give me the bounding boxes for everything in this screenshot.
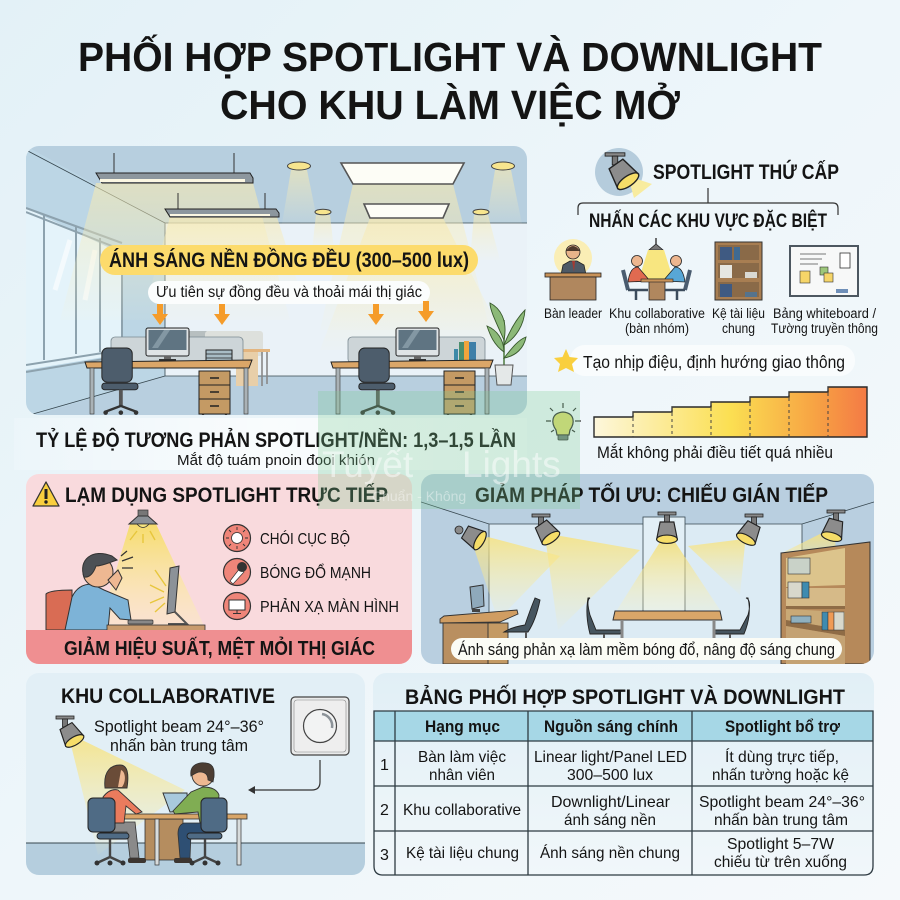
beam [71,739,185,855]
row 3: 3 [380,847,389,864]
dimmer switch [291,697,349,755]
ambient pill: ÁNH SÁNG NỀN ĐỒNG ĐỀU (300–500 lux) [109,248,469,272]
effect 1: glare: CHÓI CỤC BỘ [260,529,350,548]
effect 3: reflection: PHẢN XẠ MÀN HÌNH [260,597,399,616]
lamp [129,510,157,543]
watermark: Chuẩn - Không [372,488,466,504]
spotlight [56,716,86,750]
row 1: Bàn làm việc [418,749,506,766]
back wall [166,223,527,224]
linear lights [96,153,279,217]
light beams [66,170,522,330]
row 2: nhấn bàn trung tâm [714,812,848,829]
icon: shelf [715,242,762,300]
row 2: Downlight/Linear [551,794,671,811]
chairs [504,598,750,640]
consequence text: GIẢM HIỆU SUẤT, MỆT MỎI THỊ GIÁC [64,636,375,660]
solution caption pill: Ánh sáng phản xạ làm mềm bóng đổ, nâng độ sáng chung [458,640,835,659]
woman [88,765,146,866]
panel: collaborative zone [26,673,365,875]
labels: accent zones: Kệ tài liệu [712,306,765,321]
desk group left [85,328,270,418]
icon: whiteboard [790,246,858,296]
desk [107,625,205,631]
labels: accent zones: chung [722,321,755,336]
panel: secondary spotlight [544,148,878,462]
panel: indirect lighting solution [421,474,874,664]
labels: accent zones: Bảng whiteboard / [773,306,876,321]
solution heading: GIẢM PHÁP TỐI ƯU: CHIẾU GIÁN TIẾP [475,483,828,507]
note pill: Ưu tiên sự đồng đều và thoải mái thị giác [156,284,422,301]
rhythm pill: Tạo nhịp điệu, định hướng giao thông [583,352,845,372]
row 1 [380,747,849,784]
table heading: BẢNG PHỐI HỢP SPOTLIGHT VÀ DOWNLIGHT [405,685,845,709]
table header row [374,711,873,741]
watermark: Tuyết [322,444,414,485]
row 2: 2 [380,802,389,819]
left wall [26,146,165,420]
icon: warning [33,482,59,506]
spotlights [455,510,846,552]
row 2: ánh sáng nền [564,812,656,829]
title: PHỐI HỢP SPOTLIGHT VÀ DOWNLIGHT [78,34,822,80]
title: CHO KHU LÀM VIỆC MỞ [220,82,680,128]
row 2: Spotlight beam 24°–36° [699,794,865,811]
effect 2: shadow: BÓNG ĐỔ MẠNH [260,563,371,582]
spotlight heading: SPOTLIGHT THỨ CẤP [653,160,839,184]
table header row: Spotlight bổ trợ [725,718,840,736]
back wall [489,524,802,664]
left desk [440,585,518,664]
beam note: nhấn bàn trung tâm [110,737,248,755]
adaptation note: Mắt không phải điều tiết quá nhiều [597,443,833,462]
panel lights [341,163,464,218]
title [78,34,822,128]
icon: spotlight [595,148,652,198]
window [26,208,122,372]
accent heading: NHẤN CÁC KHU VỰC ĐẶC BIỆT [589,210,827,232]
beam note: Spotlight beam 24°–36° [94,718,264,736]
plant [487,303,526,385]
icon: collaborative group [623,238,690,300]
labels: accent zones [544,306,878,336]
arrow [248,760,320,794]
row 1: Linear light/Panel LED [534,749,687,766]
row 3: Spotlight 5–7W [727,836,835,853]
row 3: chiếu từ trên xuống [714,854,847,871]
misuse heading: LẠM DỤNG SPOTLIGHT TRỰC TIẾP [65,484,388,507]
table header row: Nguồn sáng chính [544,718,678,736]
watermark: Lights [462,444,561,485]
effect 3: reflection [224,592,399,620]
icon: bulb [546,403,581,440]
row 2: Khu collaborative [403,802,521,819]
row 1: nhân viên [429,767,495,784]
beams [473,534,838,630]
desk group right [331,328,493,418]
person at desk [46,551,153,630]
center table [613,611,722,640]
row 1: Ít dùng trực tiếp, [725,747,839,766]
panel: coordination table [373,673,874,877]
effect 2: shadow [224,558,371,586]
beam note [94,718,264,755]
contrast ratio band [14,418,527,470]
rhythm pill [554,345,855,376]
table grid [374,711,873,875]
panel: direct spotlight misuse [26,474,412,664]
downlights [288,162,514,215]
labels: accent zones: Khu collaborative [609,306,705,321]
table [122,814,247,865]
row 1: 1 [380,757,389,774]
row 2 [380,794,865,829]
bracket [578,188,838,215]
effect band [26,630,412,664]
contrast ratio band: TỶ LỆ ĐỘ TƯƠNG PHẢN SPOTLIGHT/NỀN: 1,3–1,5 LẦN [36,428,516,452]
row 3: Ánh sáng nền chung [540,843,680,862]
row 1: 300–500 lux [567,767,653,784]
orange arrows [152,301,434,325]
contrast ratio band: Mắt độ tuám pnoin đooi khión [177,452,375,469]
effect 1: glare [224,524,350,552]
beam [109,524,203,624]
row 3 [380,836,847,871]
icon: leader desk [545,239,601,300]
labels: accent zones: Tường truyền thông [771,321,878,336]
ceiling [26,146,527,224]
panel: ambient office scene [26,146,527,420]
column [643,517,685,613]
monitor with glare [150,566,187,624]
labels: accent zones: (bàn nhóm) [625,321,689,336]
row 1: nhấn tường hoặc kệ [712,767,849,784]
man [163,763,227,866]
collaborative heading: KHU COLLABORATIVE [61,685,275,708]
ambient pill [100,245,478,275]
adaptation step chart [594,387,867,437]
row 3: Kệ tài liệu chung [406,845,519,862]
watermark [318,391,580,509]
floor [26,376,527,418]
bookcase [781,542,870,664]
table header row: Hạng mục [425,718,500,736]
labels: accent zones: Bàn leader [544,306,602,321]
